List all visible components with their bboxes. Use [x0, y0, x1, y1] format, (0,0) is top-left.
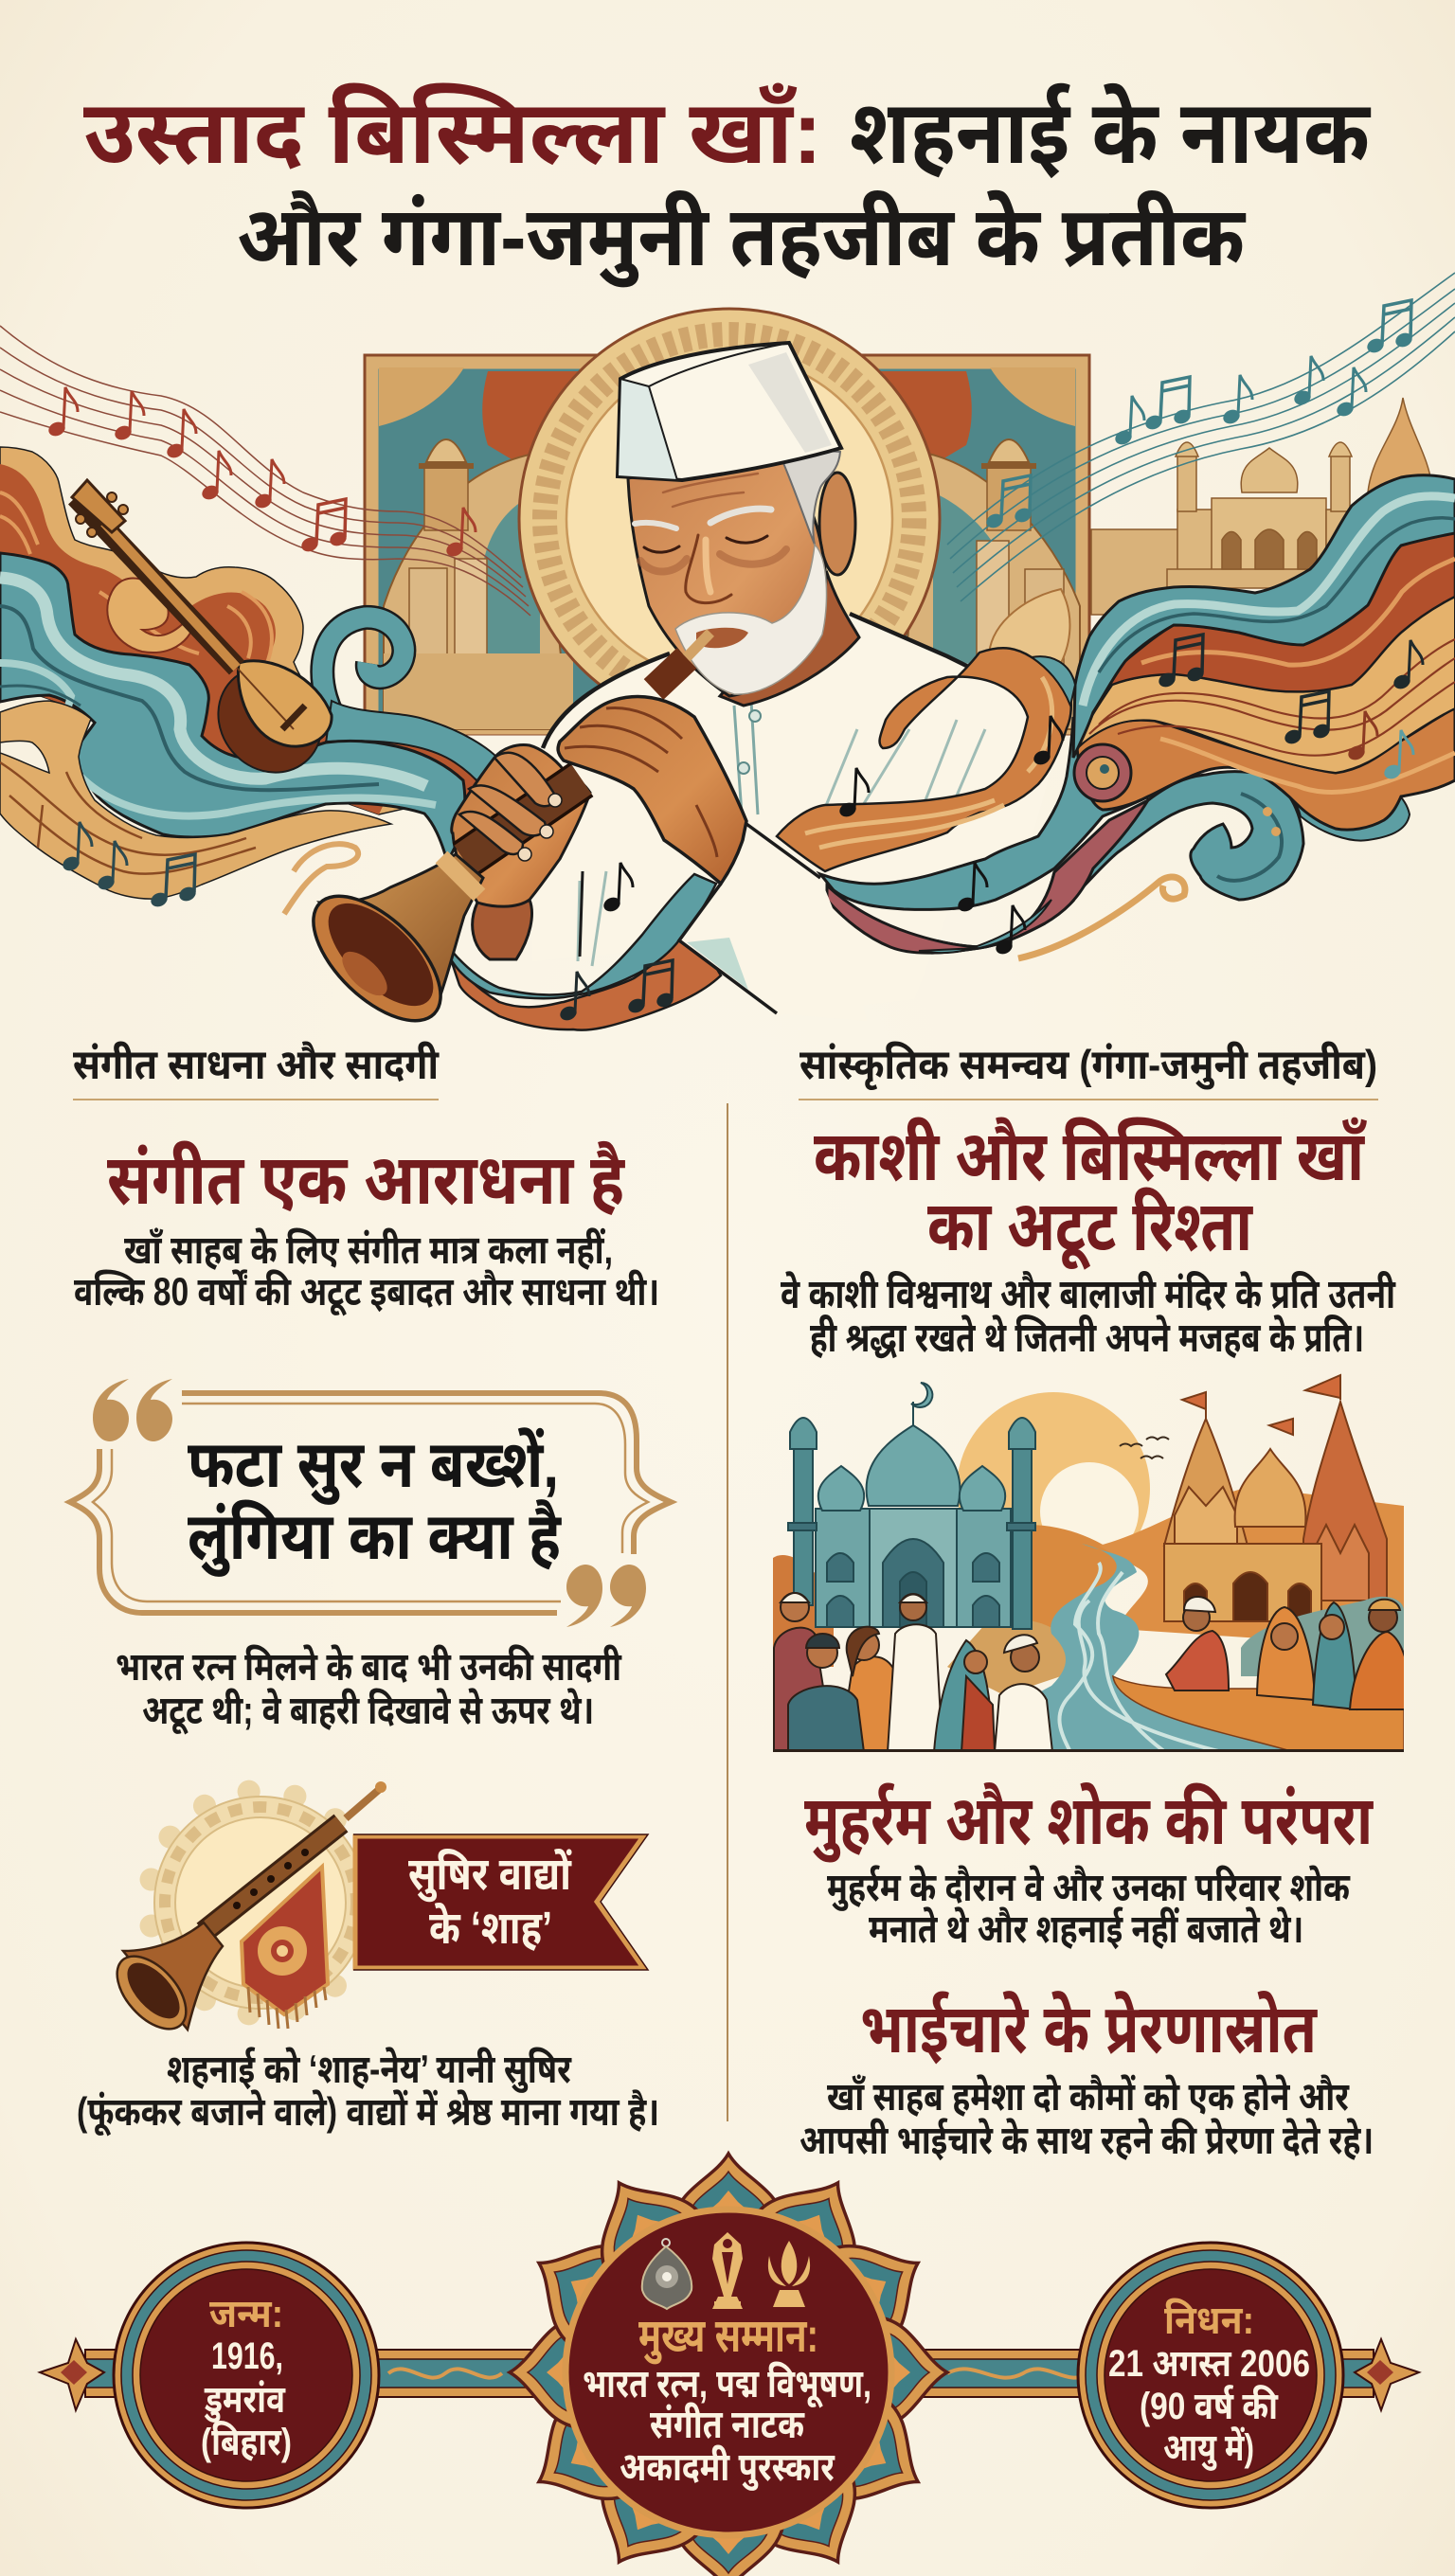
wave: terracotta with tan edge	[0, 447, 483, 814]
medallion: birth: जन्म:	[209, 2291, 283, 2335]
music staff right	[947, 273, 1455, 601]
text: simplicity	[116, 1644, 622, 1735]
man: kurta	[531, 614, 1070, 1015]
medallion: birth: डुमरांव	[204, 2379, 286, 2423]
man: neck	[720, 573, 859, 706]
man: hair	[777, 448, 840, 545]
icon: opening quote	[93, 1379, 172, 1441]
text: shehnai: (फूंककर बजाने वाले) वाद्यों में श्रेष्ठ माना गया है।	[77, 2089, 659, 2137]
medallion: death: 21 अगस्त 2006	[1108, 2343, 1310, 2385]
hero illustration	[0, 273, 1455, 1043]
section: muharram	[804, 1782, 1374, 1951]
text: simplicity: अटूट थी; वे बाहरी दिखावे से ऊपर थे।	[142, 1688, 594, 1735]
section: music as worship	[74, 1140, 659, 1316]
sitar	[72, 480, 343, 794]
quote frame	[70, 1393, 671, 1613]
honours text: अकादमी पुरस्कार	[620, 2444, 835, 2491]
wave: purple ribbon	[827, 800, 1148, 953]
section: kashi	[781, 1117, 1396, 1361]
ribbon: सुषिर वाद्यों	[408, 1848, 572, 1902]
flowing bands	[451, 863, 721, 1030]
lower hand	[452, 745, 590, 906]
medallion: death: आयु में)	[1163, 2426, 1254, 2471]
icon: trophy	[712, 2232, 743, 2309]
ornamental sun	[149, 1791, 372, 2014]
column heading: left: संगीत साधना और सादगी	[73, 1041, 440, 1088]
section: music as worship: खाँ साहब के लिए संगीत मात्र कला नहीं,	[124, 1227, 613, 1272]
medallion: birth	[114, 2243, 379, 2508]
title	[83, 82, 1372, 288]
shehnai instrument	[292, 633, 710, 1043]
man: beard	[675, 545, 827, 694]
section: kashi: का अटूट रिश्ता	[927, 1187, 1253, 1270]
people left	[774, 1593, 1052, 1752]
wave: terracotta	[1093, 533, 1455, 712]
strands across kurta	[777, 648, 1075, 957]
central medallion: honours	[510, 2154, 947, 2576]
man: ear	[819, 473, 855, 575]
people right	[1166, 1597, 1411, 1709]
medallion: death: निधन:	[1164, 2298, 1254, 2342]
centre disc	[566, 2209, 891, 2535]
timeline band	[40, 2339, 1419, 2410]
sun	[959, 1392, 1150, 1534]
quote callout	[70, 1379, 671, 1627]
icon: lotus	[768, 2241, 810, 2307]
notes on waves	[1157, 635, 1423, 746]
honours text: मुख्य सम्मान:	[638, 2309, 818, 2366]
right end cap	[1355, 2339, 1419, 2410]
ribbon: के ‘शाह’	[429, 1902, 552, 1954]
ornament strokes	[284, 844, 358, 914]
music staff left	[0, 326, 530, 616]
section: music as worship: संगीत एक आराधना है	[107, 1140, 625, 1219]
text: shehnai	[77, 2047, 659, 2137]
wave: tan	[0, 701, 391, 899]
notes on tan wave	[61, 822, 198, 909]
birds	[1120, 1438, 1169, 1458]
lower sleeve	[679, 824, 867, 1021]
man: face	[628, 450, 826, 696]
left end cap	[40, 2339, 104, 2410]
honours text: संगीत नाटक	[650, 2402, 805, 2446]
wave: teal tail	[326, 701, 497, 786]
title: और गंगा-जमुनी तहजीब के प्रतीक	[237, 189, 1247, 288]
man: facial features	[635, 474, 786, 603]
notes left	[46, 387, 476, 559]
river	[985, 1544, 1298, 1752]
centre divider	[727, 1103, 728, 2121]
notes right	[984, 300, 1414, 530]
icon: closing quote	[566, 1565, 646, 1627]
honours text	[583, 2309, 871, 2491]
section: muharram: मनाते थे और शहनाई नहीं बजाते थे।	[869, 1906, 1303, 1951]
man: cap	[618, 343, 841, 480]
medallion: death: (90 वर्ष की	[1140, 2385, 1279, 2427]
flourish	[1018, 877, 1185, 958]
orange cloth	[1113, 1676, 1404, 1752]
medallion: birth: 1916,	[211, 2335, 283, 2377]
purple ribbon overlay	[826, 850, 1075, 955]
fingers on shehnai	[459, 753, 562, 861]
hills	[773, 1487, 1404, 1695]
lotus petals	[510, 2154, 947, 2576]
quote text: फटा सुर न बख्शें,	[188, 1427, 559, 1506]
wave: tan	[1077, 597, 1455, 773]
wave: lower teal swirl	[1023, 772, 1410, 933]
spiral	[1074, 744, 1131, 801]
section: brotherhood: भाईचारे के प्रेरणास्रोत	[860, 1991, 1318, 2067]
wave: big teal strand	[820, 717, 1155, 909]
quote text	[188, 1427, 562, 1578]
temples	[1164, 1375, 1387, 1621]
title: उस्ताद बिस्मिल्ला खाँ:	[83, 82, 822, 182]
wave: teal	[1073, 475, 1455, 758]
bushes	[1241, 1597, 1404, 1676]
quote text: लुंगिया का क्या है	[188, 1498, 562, 1578]
small shehnai	[104, 1781, 386, 2042]
illustration: mosque, river and temple	[773, 1375, 1411, 1752]
forearm under lower hand	[473, 900, 531, 959]
icon: bharat ratna medal	[642, 2239, 692, 2309]
spiral swirl	[322, 617, 404, 731]
left waves	[0, 447, 497, 914]
pennant	[242, 1867, 328, 2029]
scene baseline	[773, 1749, 1404, 1752]
text: shehnai: शहनाई को ‘शाह-नेय’ यानी सुषिर	[167, 2047, 572, 2093]
honours text: भारत रत्न, पद्म विभूषण,	[583, 2361, 871, 2408]
text: simplicity: भारत रत्न मिलने के बाद भी उनकी सादगी	[116, 1644, 622, 1689]
medallion: birth: (बिहार)	[201, 2421, 292, 2463]
wave: teal	[0, 553, 465, 861]
ornate arch panel	[365, 355, 1089, 734]
skyline right	[1091, 398, 1432, 615]
section: music as worship: वल्कि 80 वर्षों की अटूट इबादत और साधना थी।	[74, 1269, 659, 1316]
ribbons over kurta	[817, 805, 1075, 955]
right waves	[820, 475, 1455, 958]
teal ribbon overlay	[817, 805, 1075, 911]
ribbon	[353, 1834, 648, 1970]
mosque	[788, 1383, 1035, 1629]
medallion: death	[1078, 2243, 1343, 2508]
cream gap	[0, 741, 49, 773]
upper hand and forearm	[558, 697, 746, 884]
halo	[519, 309, 940, 729]
shehnai emblem	[104, 1781, 648, 2042]
column heading: right: सांस्कृतिक समन्वय (गंगा-जमुनी तहजीब)	[799, 1041, 1377, 1090]
section: brotherhood	[799, 1991, 1374, 2162]
title: शहनाई के नायक	[850, 82, 1372, 182]
man: mouth	[696, 628, 748, 648]
lower teal ribbon overlay	[919, 900, 1051, 953]
wave: lower orange	[1077, 708, 1455, 830]
